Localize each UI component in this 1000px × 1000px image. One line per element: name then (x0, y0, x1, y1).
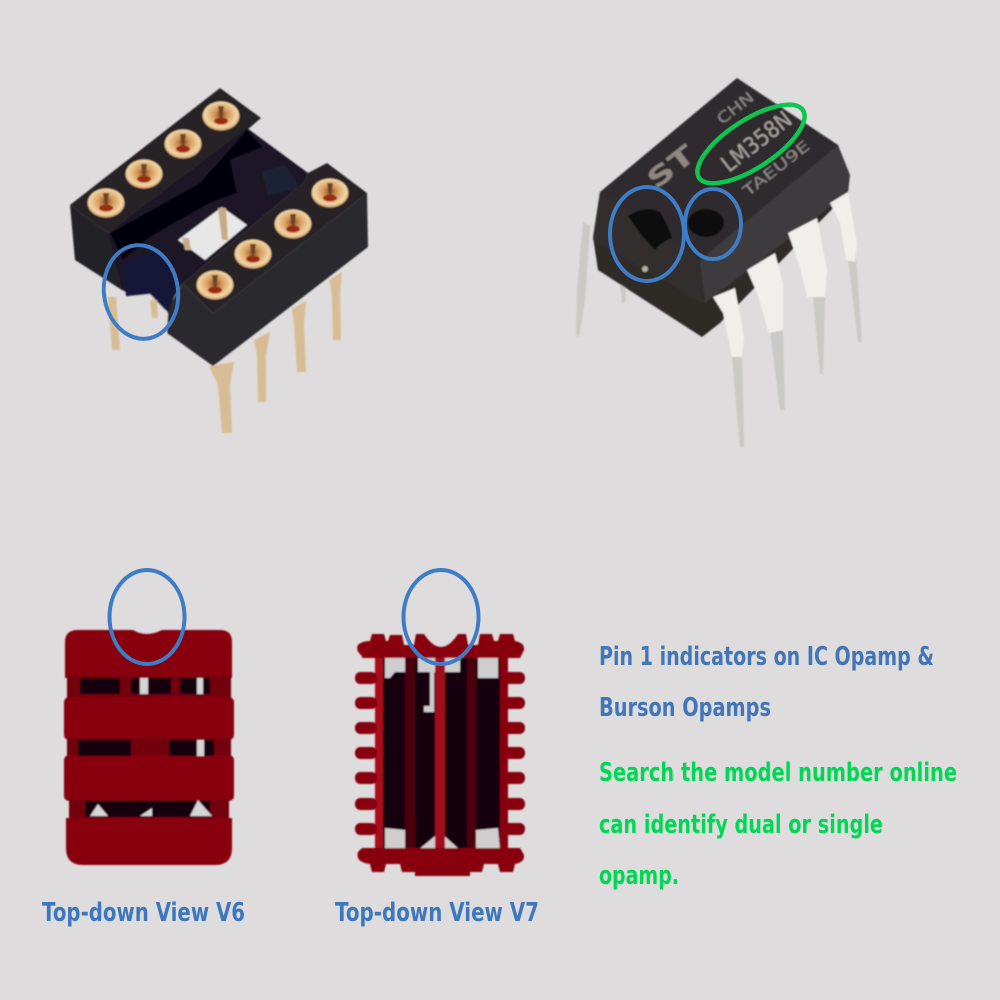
socket top surface (70, 88, 261, 233)
V7 side rails (375, 650, 383, 855)
V7 pin 1 marker (404, 570, 478, 664)
chip dimples (628, 209, 672, 250)
socket left face (70, 205, 124, 290)
socket interior well (108, 128, 308, 310)
chip top markings: LM358N (717, 107, 797, 178)
pin 1 marker: left dimple (610, 187, 684, 281)
V7 inner bars (405, 660, 415, 850)
photo: LM358N IC chip (576, 78, 862, 447)
green note: opamp. (599, 861, 679, 891)
blue note (599, 642, 934, 723)
V7 bottom frame (358, 848, 524, 876)
socket pin-1 notch (124, 250, 178, 312)
photo: DIP-8 socket (70, 88, 368, 433)
V7 window (381, 656, 501, 851)
caption: V6: Top-down View V6 (42, 898, 245, 928)
photo: Burson V7 top-down (355, 634, 525, 876)
V6 bands (65, 630, 232, 678)
socket front face (167, 193, 368, 366)
pin 1 marker: right dimple (685, 189, 741, 259)
green note: can identify dual or single (599, 810, 883, 840)
photo: LM358N IC chip: CHN (713, 88, 758, 128)
photo: LM358N IC chip: ST (642, 140, 702, 196)
model number marker (686, 90, 816, 198)
socket centre window (178, 207, 247, 260)
photo: LM358N IC chip: TAEU9E (738, 137, 814, 201)
chip left face (593, 192, 703, 303)
chip back leads (576, 222, 626, 337)
V6 pin 1 marker (110, 570, 184, 664)
V7 top frame with notch (357, 634, 524, 658)
pin 1 marker on socket (98, 240, 184, 344)
socket gold contacts (88, 102, 348, 300)
green note (599, 758, 957, 891)
chip right face (700, 145, 850, 303)
caption: V7: Top-down View V7 (335, 898, 539, 928)
chip top face (600, 78, 838, 260)
socket pins (108, 272, 342, 433)
photo: Burson V6 top-down (64, 630, 234, 865)
V7 cooling fins (355, 672, 525, 835)
V6 slots (78, 678, 214, 817)
chip lower body (593, 145, 848, 337)
blue note: Burson Opamps (599, 693, 771, 723)
chip front leads (732, 258, 862, 447)
